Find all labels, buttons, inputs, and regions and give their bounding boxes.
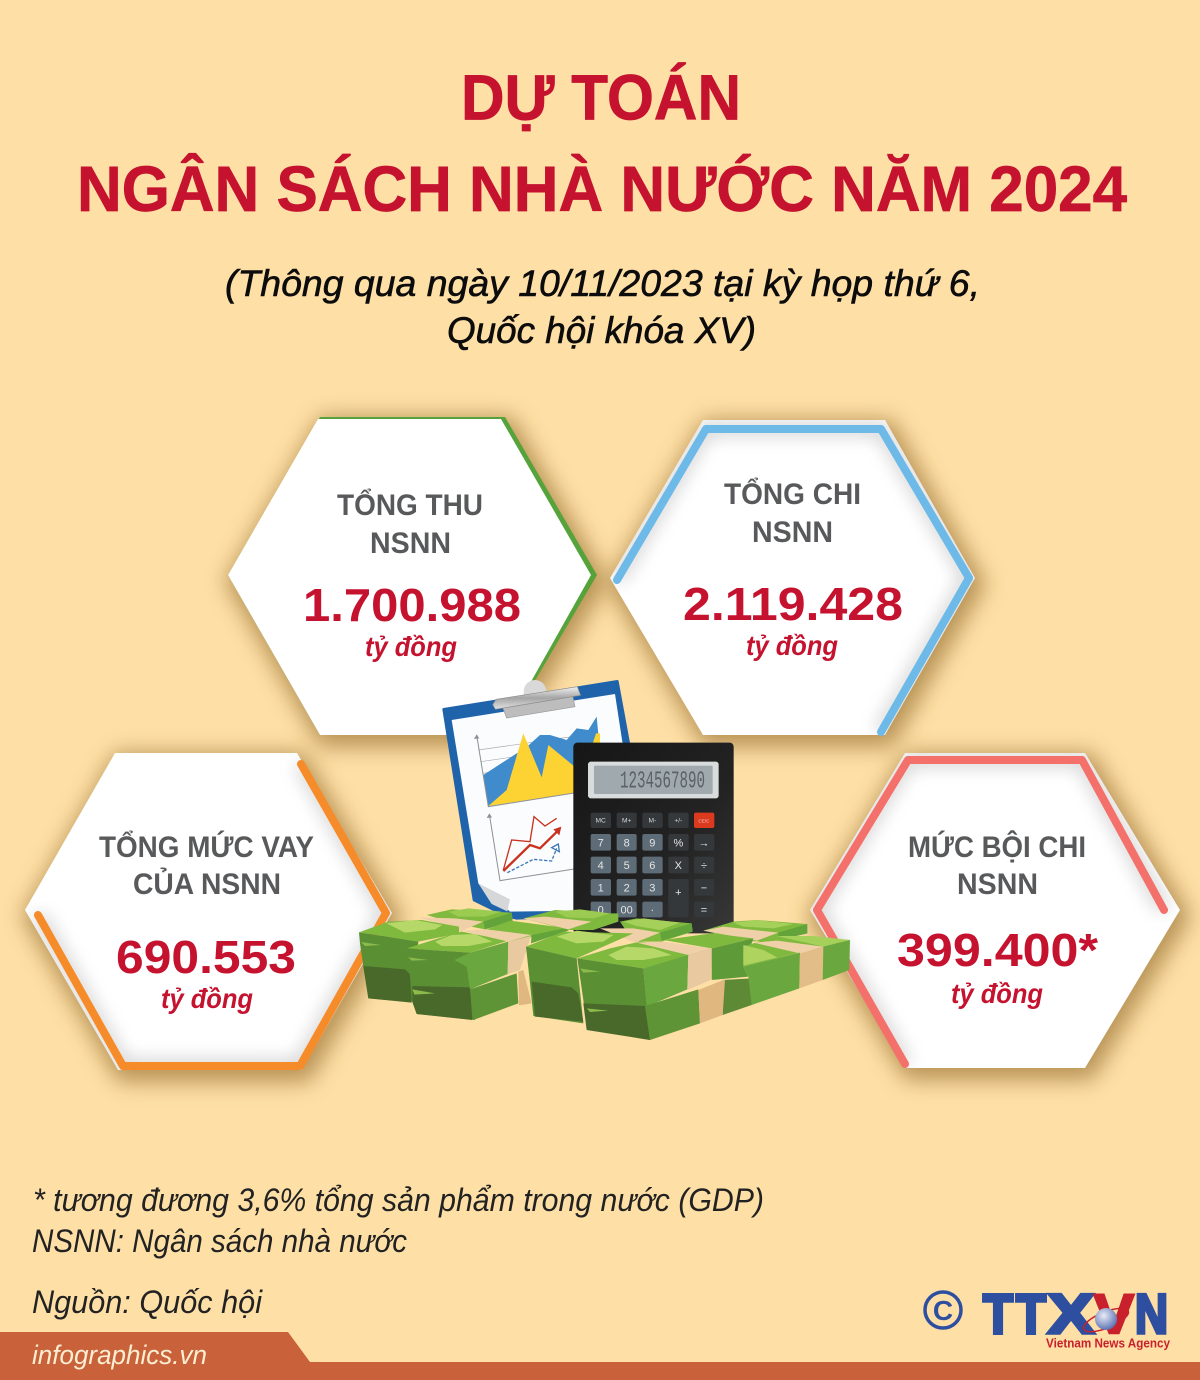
logo: TTXVN: T bbox=[1016, 1282, 1046, 1345]
panel: tổng mức vay bbox=[25, 753, 396, 1076]
panel: tổng mức vay: CỦA NSNN bbox=[133, 867, 281, 901]
icon: calculator: 8 bbox=[624, 837, 630, 849]
icon: calculator: +/- bbox=[674, 818, 682, 825]
panel: tổng mức vay: TỔNG MỨC VAY bbox=[99, 830, 314, 864]
icon: calculator: 9 bbox=[649, 837, 655, 849]
panel: tổng mức vay: 690.553 bbox=[116, 931, 296, 983]
icon: calculator: ÷ bbox=[701, 860, 707, 872]
icon: calculator: 4 bbox=[598, 860, 604, 872]
icon: calculator: 1234567890 bbox=[620, 768, 705, 795]
icon: calculator bbox=[573, 743, 734, 933]
icon: right money stack bbox=[523, 909, 850, 1040]
copyright symbol: C bbox=[933, 1295, 953, 1326]
panel: mức bội chi: 399.400* bbox=[897, 924, 1098, 976]
icon: left money stack bbox=[359, 908, 568, 1020]
panel: tổng mức vay: tỷ đồng bbox=[161, 983, 253, 1014]
footnotes: Nguồn: Quốc hội bbox=[32, 1284, 263, 1320]
icon: calculator: · bbox=[650, 905, 654, 917]
subtitle: Quốc hội khóa XV) bbox=[447, 310, 756, 351]
logo: TTXVN: N bbox=[1135, 1282, 1168, 1345]
footer band: infographics.vn bbox=[32, 1340, 207, 1370]
panel: tổng thu: TỔNG THU bbox=[337, 488, 483, 522]
logo: TTXVN: V bbox=[1094, 1282, 1134, 1345]
title bbox=[77, 62, 1127, 225]
icon: clipboard with charts bbox=[444, 680, 650, 918]
panel: mức bội chi: NSNN bbox=[957, 868, 1038, 901]
icon: calculator: MC bbox=[595, 818, 606, 825]
copyright symbol bbox=[925, 1292, 961, 1328]
illustration: clipboard, calculator and money bbox=[359, 680, 850, 1040]
panel: mức bội chi: tỷ đồng bbox=[951, 978, 1043, 1009]
icon: calculator: 5 bbox=[624, 860, 630, 872]
icon: calculator: 00 bbox=[621, 905, 633, 917]
icon: calculator: + bbox=[675, 887, 682, 899]
icon: calculator: M- bbox=[648, 818, 656, 825]
icon: calculator: 7 bbox=[598, 837, 604, 849]
panel: tổng chi: 2.119.428 bbox=[683, 578, 903, 630]
logo: TTXVN: Vietnam News Agency bbox=[1046, 1336, 1171, 1350]
icon: calculator: X bbox=[675, 860, 683, 872]
logo: TTXVN: X bbox=[1048, 1282, 1094, 1345]
icon: calculator: → bbox=[699, 837, 709, 849]
panel: tổng chi: TỔNG CHI bbox=[724, 477, 861, 511]
icon: calculator: 1 bbox=[598, 882, 604, 894]
panel: tổng chi bbox=[610, 420, 979, 741]
logo: TTXVN bbox=[983, 1282, 1171, 1350]
footnotes bbox=[32, 1182, 764, 1320]
footnotes: * tương đương 3,6% tổng sản phẩm trong nước (GDP) bbox=[33, 1182, 764, 1218]
icon: calculator: − bbox=[701, 882, 707, 894]
icon: calculator: = bbox=[701, 905, 707, 917]
icon: calculator: 3 bbox=[649, 882, 655, 894]
icon: calculator: M+ bbox=[622, 818, 631, 825]
logo: TTXVN: T bbox=[983, 1282, 1013, 1345]
footer band bbox=[0, 1332, 1200, 1380]
panel: tổng thu: tỷ đồng bbox=[365, 631, 457, 662]
footnotes: NSNN: Ngân sách nhà nước bbox=[32, 1223, 407, 1259]
panel: mức bội chi: MỨC BỘI CHI bbox=[908, 830, 1086, 864]
subtitle bbox=[225, 263, 980, 351]
icon: calculator: 6 bbox=[649, 860, 655, 872]
panel: tổng thu bbox=[228, 417, 601, 741]
title: NGÂN SÁCH NHÀ NƯỚC NĂM 2024 bbox=[77, 152, 1127, 225]
panel: tổng thu: NSNN bbox=[370, 527, 451, 560]
icon: calculator: % bbox=[673, 837, 683, 849]
subtitle: (Thông qua ngày 10/11/2023 tại kỳ họp thứ 6, bbox=[225, 263, 980, 304]
title: DỰ TOÁN bbox=[461, 62, 741, 134]
icon: calculator: 0 bbox=[598, 905, 604, 917]
panel: tổng chi: tỷ đồng bbox=[746, 630, 838, 661]
panel: tổng thu: 1.700.988 bbox=[303, 579, 521, 631]
icon: calculator: 2 bbox=[624, 882, 630, 894]
icon: calculator: CE/C bbox=[698, 819, 710, 824]
panel: tổng chi: NSNN bbox=[752, 516, 833, 549]
panel: mức bội chi bbox=[810, 753, 1184, 1074]
